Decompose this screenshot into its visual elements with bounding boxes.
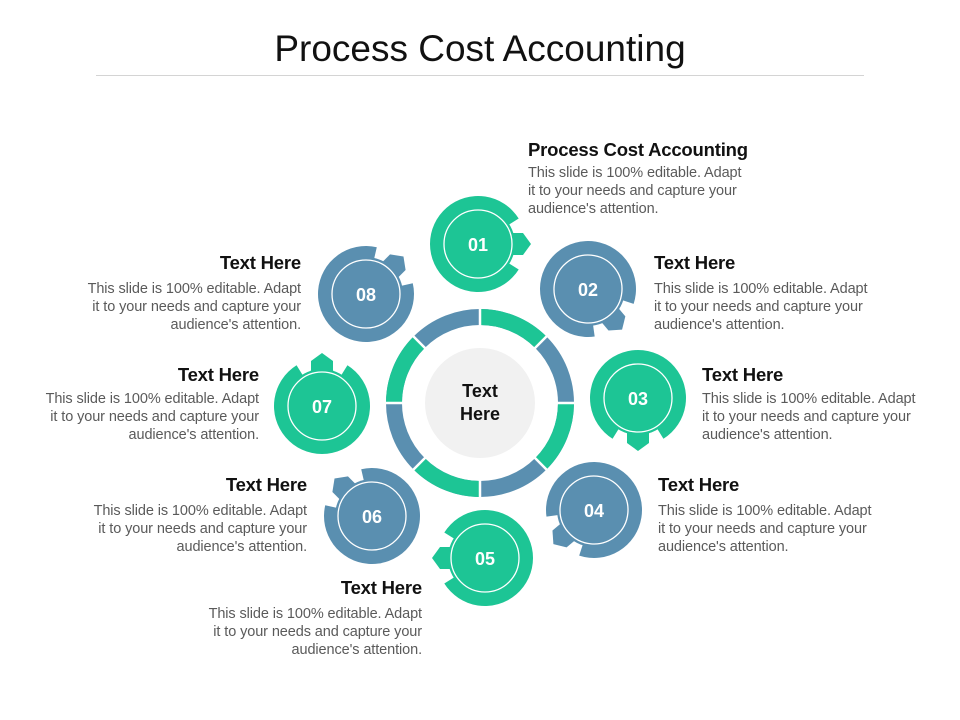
text: process cost accounting: it to your needs and capture your xyxy=(528,183,737,199)
circle 02: 02 xyxy=(578,280,598,300)
circle 03 xyxy=(590,350,686,451)
text 04: audience's attention. xyxy=(658,539,788,555)
text 08: Text Here xyxy=(220,252,301,273)
circle 05: 05 xyxy=(475,549,495,569)
text 02: audience's attention. xyxy=(654,317,784,333)
circle 08: 08 xyxy=(356,285,376,305)
text 04: it to your needs and capture your xyxy=(658,521,867,537)
center circle: Text xyxy=(462,381,498,401)
text 08: it to your needs and capture your xyxy=(92,299,301,315)
circle 04 xyxy=(523,442,662,581)
text 02 xyxy=(654,252,868,333)
text 05 xyxy=(208,577,422,658)
text 02: it to your needs and capture your xyxy=(654,299,863,315)
text 06 xyxy=(94,474,307,555)
text 07: audience's attention. xyxy=(129,427,259,443)
text 07: Text Here xyxy=(178,364,259,385)
text: process cost accounting: Process Cost Accounting xyxy=(528,139,748,160)
text 07: it to your needs and capture your xyxy=(50,409,259,425)
text 06: Text Here xyxy=(226,474,307,495)
title: Process Cost Accounting xyxy=(274,28,686,69)
text 03 xyxy=(702,364,916,443)
circle 04: 04 xyxy=(584,501,604,521)
text 03: Text Here xyxy=(702,364,783,385)
text 02: Text Here xyxy=(654,252,735,273)
text 04 xyxy=(658,474,872,555)
text 03: This slide is 100% editable. Adapt xyxy=(702,391,915,407)
text 04: This slide is 100% editable. Adapt xyxy=(658,503,871,519)
text 07 xyxy=(46,364,259,443)
text: process cost accounting: This slide is 100% editable. Adapt xyxy=(528,165,741,181)
text 08: This slide is 100% editable. Adapt xyxy=(88,281,301,297)
center circle xyxy=(425,348,535,458)
circle 05 xyxy=(432,510,533,606)
text 05: Text Here xyxy=(341,577,422,598)
text 06: audience's attention. xyxy=(177,539,307,555)
text 05: it to your needs and capture your xyxy=(213,624,422,640)
circle 08 xyxy=(298,223,437,362)
circle 07 xyxy=(274,353,370,454)
center circle: Here xyxy=(460,404,500,424)
text 08: audience's attention. xyxy=(171,317,301,333)
circle 06: 06 xyxy=(362,507,382,527)
circle 06 xyxy=(301,445,440,584)
text 08 xyxy=(88,252,301,333)
text 06: it to your needs and capture your xyxy=(98,521,307,537)
text 07: This slide is 100% editable. Adapt xyxy=(46,391,259,407)
circle 02 xyxy=(520,221,659,360)
circle 01 xyxy=(430,196,531,292)
text: process cost accounting: audience's attention. xyxy=(528,201,658,217)
text 03: audience's attention. xyxy=(702,427,832,443)
text: process cost accounting xyxy=(528,139,748,217)
central ring xyxy=(385,308,575,498)
text 06: This slide is 100% editable. Adapt xyxy=(94,503,307,519)
text 04: Text Here xyxy=(658,474,739,495)
circle 07: 07 xyxy=(312,397,332,417)
circle 01: 01 xyxy=(468,235,488,255)
circle 03: 03 xyxy=(628,389,648,409)
text 05: This slide is 100% editable. Adapt xyxy=(209,606,422,622)
text 05: audience's attention. xyxy=(292,642,422,658)
text 02: This slide is 100% editable. Adapt xyxy=(654,281,867,297)
text 03: it to your needs and capture your xyxy=(702,409,911,425)
